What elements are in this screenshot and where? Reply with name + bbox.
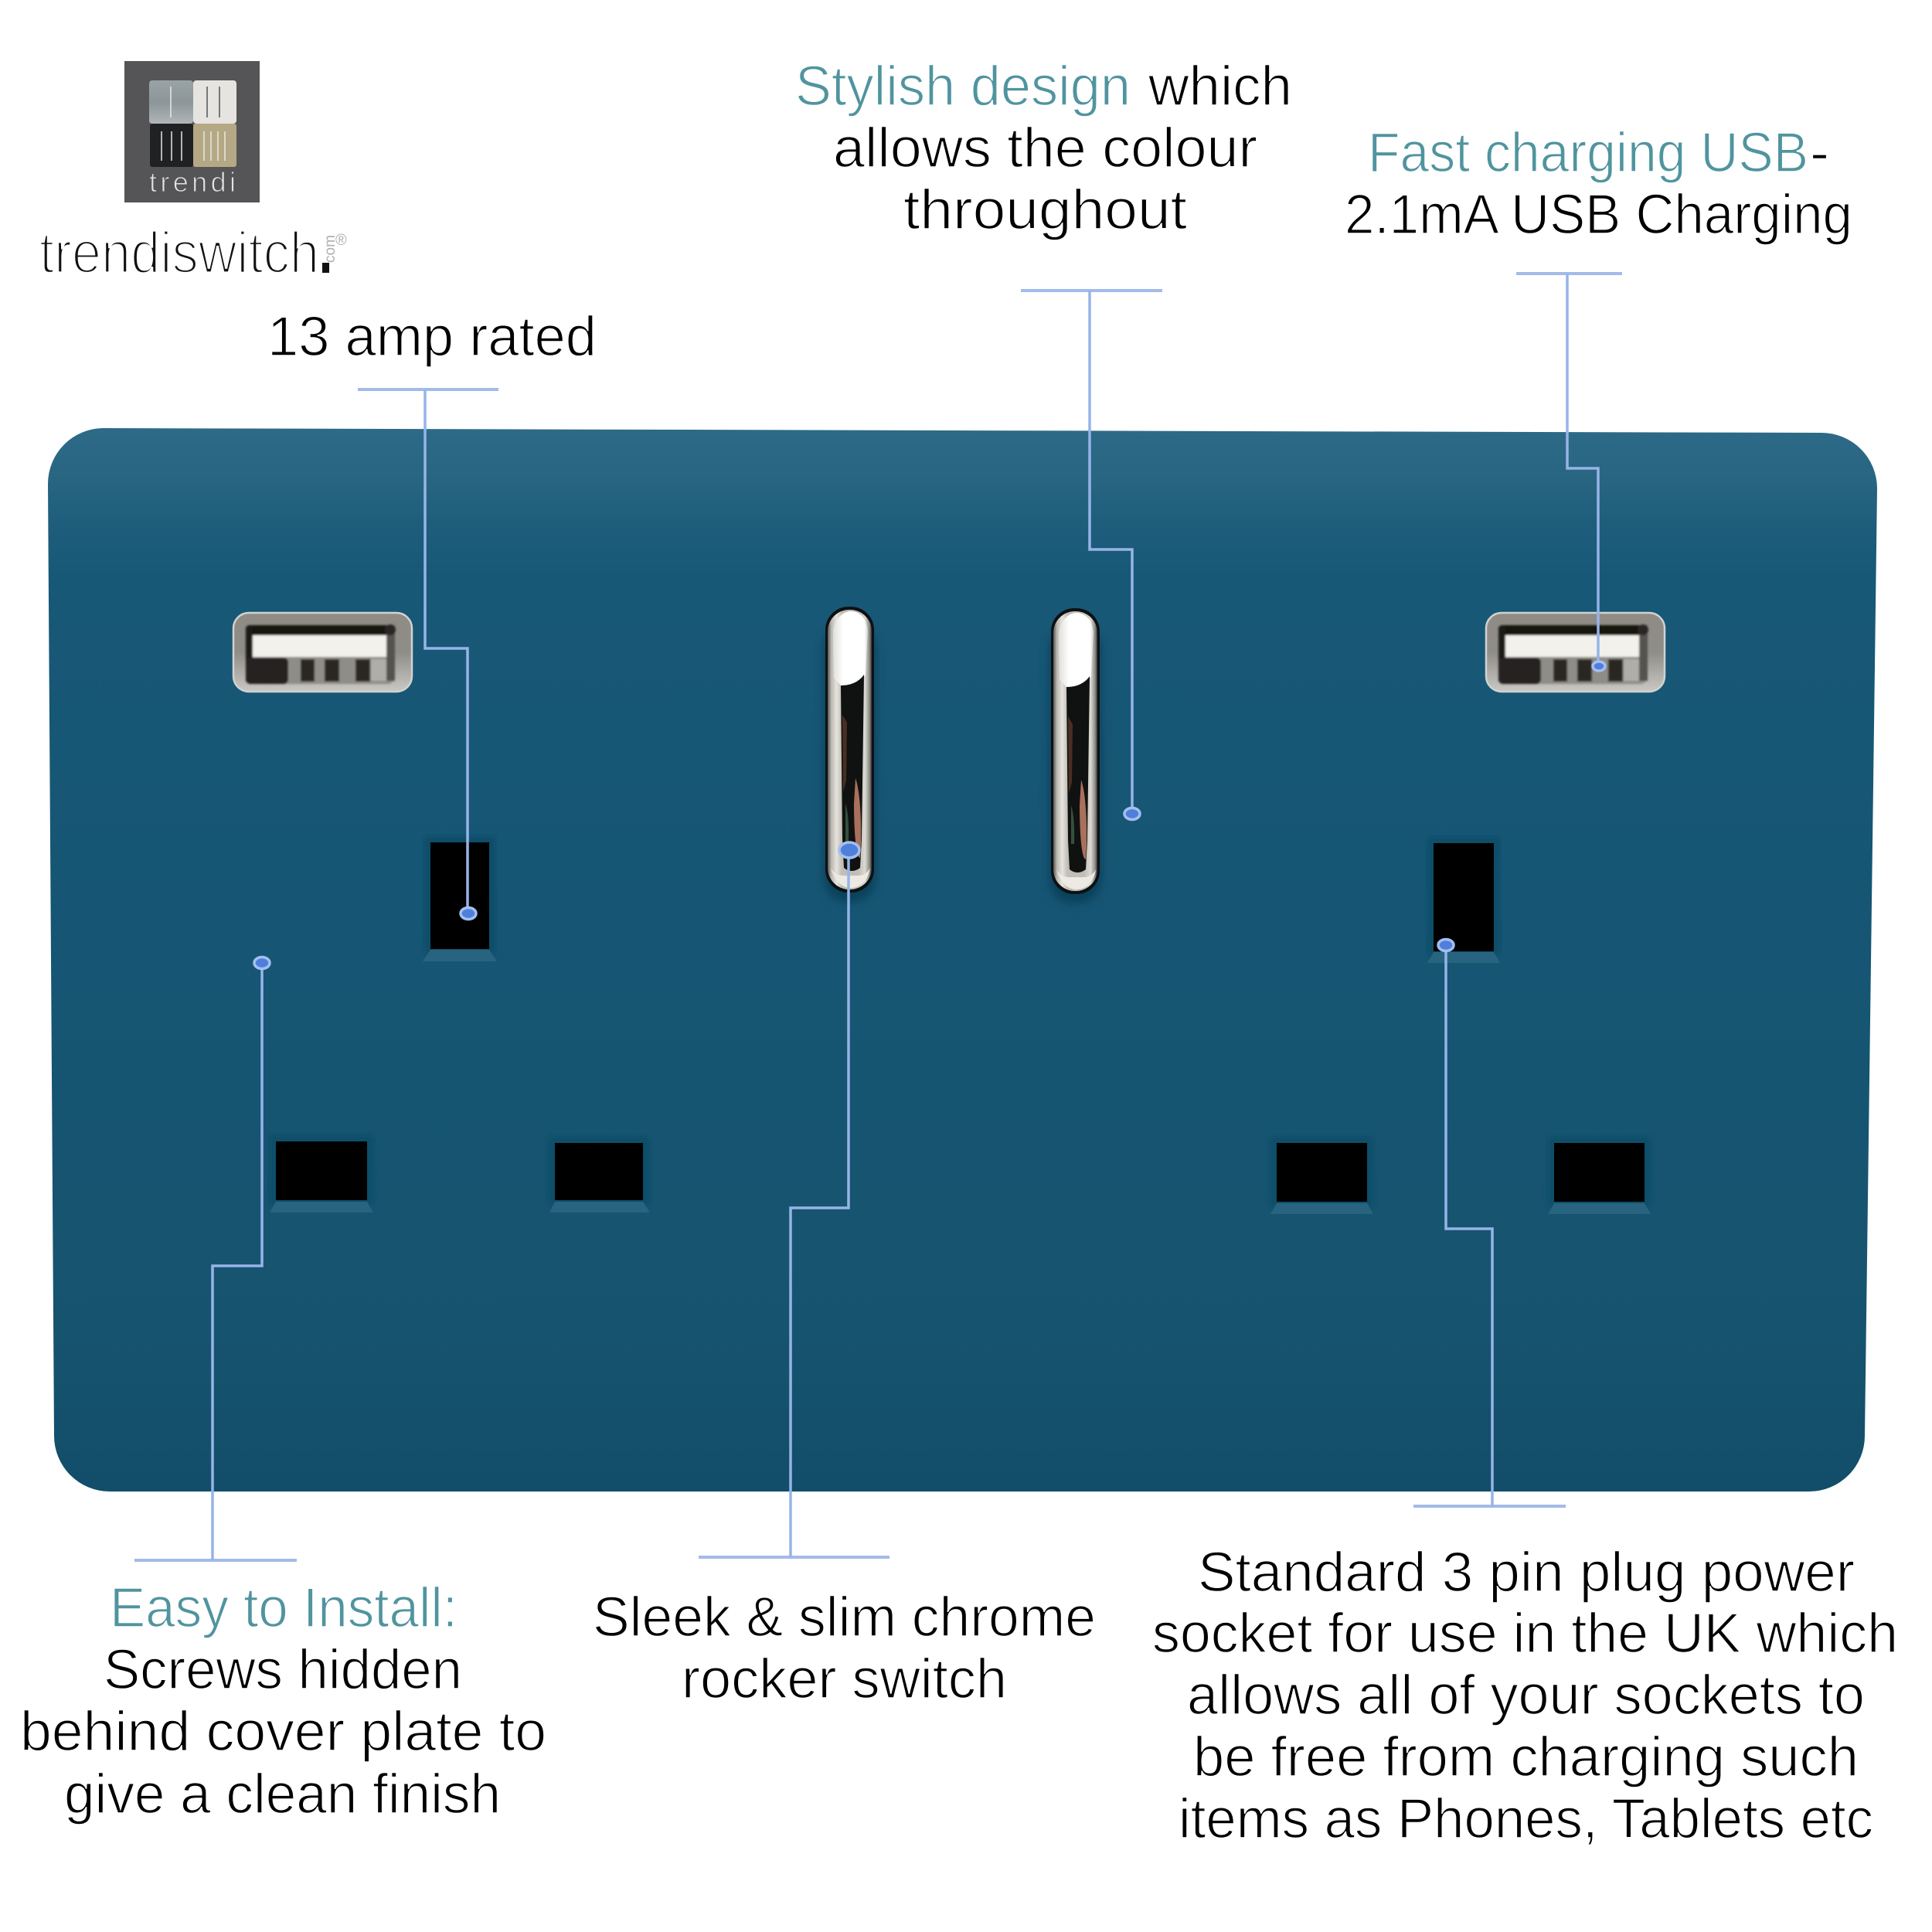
callout: sleek chrome switch: Sleek & slim chrome xyxy=(593,1587,1096,1648)
callout: standard 3 pin socket: Standard 3 pin plug power xyxy=(1198,1542,1855,1604)
socket: left live pin slot xyxy=(270,1135,373,1213)
callout: sleek chrome switch: rocker switch xyxy=(682,1648,1007,1710)
logo: trendiswitch wordmark: ® xyxy=(335,232,347,249)
callout: standard 3 pin socket: allows all of your sockets to xyxy=(1187,1665,1865,1726)
callout: stylish design: allows the colour xyxy=(833,117,1257,179)
socket: right live pin slot xyxy=(1270,1137,1373,1214)
icon: right USB port xyxy=(1486,613,1665,692)
panel: socket faceplate xyxy=(48,428,1877,1492)
callout: stylish design: throughout xyxy=(903,179,1187,241)
socket: right earth pin slot xyxy=(1427,837,1500,963)
callout: stylish design: which xyxy=(1148,56,1292,117)
callout: easy to install: give a clean finish xyxy=(64,1764,501,1825)
callout: standard 3 pin socket: items as Phones, Tablets etc xyxy=(1179,1788,1873,1850)
callout: sleek chrome switch xyxy=(593,842,1096,1710)
socket: right neutral pin slot xyxy=(1548,1137,1651,1214)
callout: standard 3 pin socket xyxy=(1152,940,1898,1850)
callout: fast charging USB: - xyxy=(1810,122,1829,184)
callout: fast charging USB: 2.1mA USB Charging xyxy=(1345,184,1852,246)
callout: fast charging USB: Fast charging USB xyxy=(1368,122,1808,184)
logo: trendiswitch wordmark: com xyxy=(322,235,338,263)
icon: left USB port xyxy=(233,613,412,692)
callout: 13 amp rated xyxy=(267,306,597,920)
logo: trendi square badge xyxy=(124,61,260,202)
callout: easy to install: Easy to Install: xyxy=(110,1577,457,1639)
callout: 13 amp rated: 13 amp rated xyxy=(267,306,597,368)
callout: fast charging USB xyxy=(1345,122,1852,671)
logo: trendi square badge: trendi xyxy=(149,166,236,198)
callout: stylish design xyxy=(795,56,1292,819)
socket: left earth pin slot xyxy=(423,836,497,961)
socket: left neutral pin slot xyxy=(549,1137,650,1213)
icon: right chrome rocker switch xyxy=(1049,608,1101,903)
icon: left chrome rocker switch xyxy=(824,607,876,902)
callout: standard 3 pin socket: socket for use in the UK which xyxy=(1152,1603,1898,1665)
callout: easy to install xyxy=(20,957,546,1825)
callout: standard 3 pin socket: be free from charging such xyxy=(1193,1726,1859,1788)
callout: easy to install: Screws hidden xyxy=(104,1639,462,1701)
logo: trendiswitch wordmark: trendiswitch xyxy=(39,220,319,286)
callout: stylish design: Stylish design xyxy=(795,56,1131,117)
callout: easy to install: behind cover plate to xyxy=(20,1701,546,1763)
